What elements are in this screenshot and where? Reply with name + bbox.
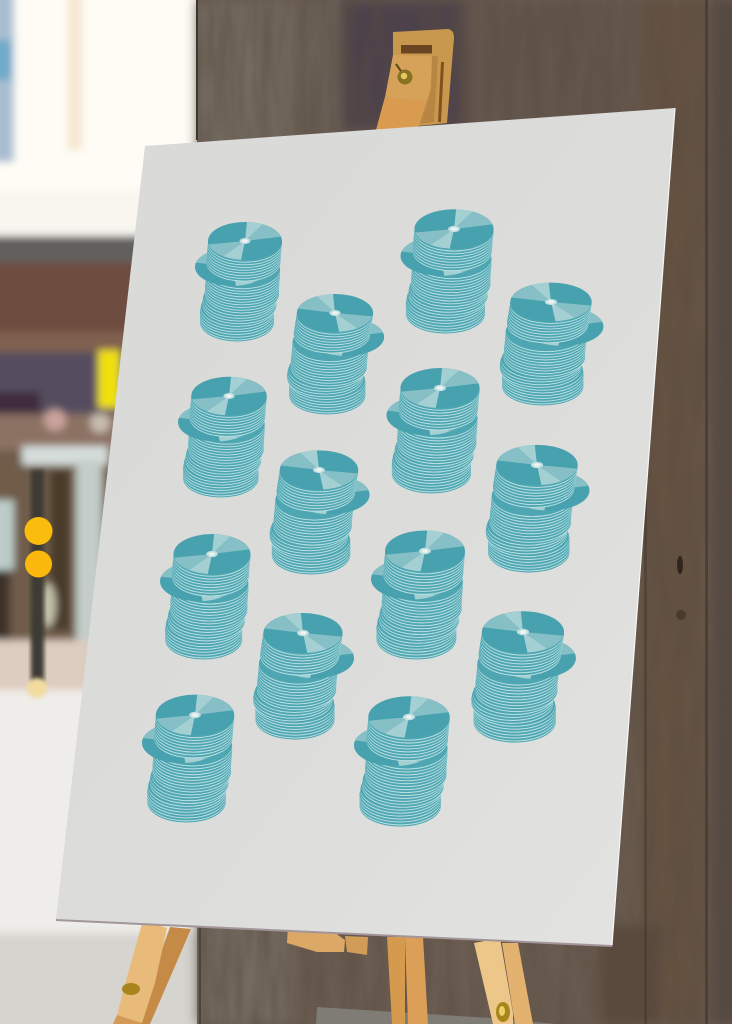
stack 8 bbox=[486, 445, 589, 573]
traffic light bbox=[24, 470, 52, 698]
stack 3 bbox=[500, 283, 603, 406]
easel legs bbox=[113, 920, 533, 1024]
stack 12 bbox=[471, 611, 576, 743]
stack 6 bbox=[386, 368, 480, 494]
background: blurred street bbox=[0, 0, 220, 1024]
wooden post bbox=[196, 0, 732, 1024]
icon: brass wing nut right bbox=[496, 1002, 510, 1022]
stack 13 bbox=[142, 695, 234, 823]
stack 10 bbox=[371, 530, 465, 660]
stack 2 bbox=[400, 209, 494, 334]
stack 7 bbox=[270, 450, 370, 575]
stack 14 bbox=[354, 696, 450, 827]
easel bottom support block bbox=[287, 925, 368, 955]
canvas panel bbox=[56, 108, 675, 945]
icon: brass wing nut left bbox=[122, 983, 140, 995]
canvas side edge shadow bbox=[56, 918, 613, 947]
stack 9 bbox=[160, 534, 250, 660]
canvas right edge highlight bbox=[612, 108, 675, 945]
stack 1 bbox=[195, 222, 282, 342]
easel top clamp bbox=[375, 29, 454, 135]
stack 4 bbox=[287, 294, 384, 414]
stack 5 bbox=[178, 377, 267, 498]
board below the canvas bbox=[316, 1007, 556, 1024]
icon: brass knob bbox=[398, 70, 412, 84]
stack 11 bbox=[253, 613, 354, 740]
